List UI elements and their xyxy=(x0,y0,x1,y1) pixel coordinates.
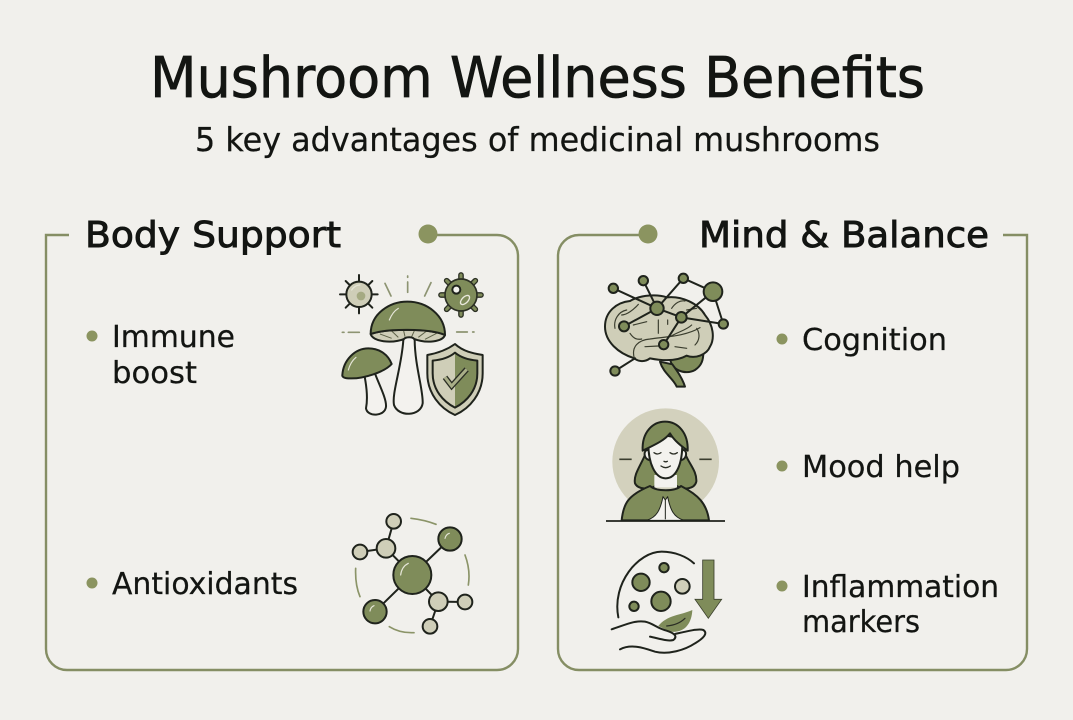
small mushroom xyxy=(342,348,392,415)
icon: antioxidant molecule xyxy=(353,514,472,634)
subtitle: 5 key advantages of medicinal mushrooms xyxy=(195,120,880,159)
label: immune boost: Immune xyxy=(112,320,235,355)
bonds xyxy=(360,521,465,626)
frame dot xyxy=(418,224,438,244)
side dashes xyxy=(619,457,712,462)
network lines xyxy=(613,278,723,371)
praying hands xyxy=(647,497,684,520)
label: mood help: Mood help xyxy=(802,450,960,485)
facial features xyxy=(654,453,677,468)
face xyxy=(648,436,682,478)
label: immune boost: boost xyxy=(112,356,197,391)
leaf xyxy=(658,610,692,632)
ears xyxy=(645,450,686,460)
radiating rays xyxy=(342,276,474,332)
frame dot xyxy=(638,224,658,244)
dashed ring xyxy=(356,518,469,633)
bullet: immune boost xyxy=(86,330,98,342)
body xyxy=(622,486,709,520)
panel: body support xyxy=(46,215,518,670)
network nodes xyxy=(609,274,728,376)
hair top xyxy=(643,422,688,451)
brain stem and cerebellum xyxy=(660,352,703,387)
panel frame xyxy=(558,235,1027,670)
icon: meditating person xyxy=(606,408,725,521)
bullet: antioxidants xyxy=(86,578,98,588)
ground line xyxy=(606,518,725,523)
big mushroom xyxy=(371,302,445,414)
brain folds xyxy=(615,301,700,358)
label: inflammation markers: markers xyxy=(802,605,920,640)
label: antioxidants: Antioxidants xyxy=(112,567,298,602)
title: Mushroom Wellness Benefits xyxy=(150,46,925,111)
shield with check xyxy=(427,344,483,415)
icon: inflammation markers decreasing xyxy=(612,552,722,653)
bullet: mood help xyxy=(776,460,788,472)
down arrow xyxy=(695,560,722,618)
panel: mind and balance xyxy=(558,215,1027,670)
bullet: cognition xyxy=(776,334,788,344)
neck xyxy=(654,475,677,487)
label: cognition: Cognition xyxy=(802,323,947,358)
halo xyxy=(612,408,719,515)
heading: body support: Body Support xyxy=(85,215,341,256)
atoms xyxy=(353,514,472,634)
back hair xyxy=(635,455,696,489)
particles xyxy=(629,563,690,611)
icon: brain network xyxy=(605,274,728,387)
label: inflammation markers: Inflammation xyxy=(802,570,999,605)
bullet: inflammation markers xyxy=(776,580,788,592)
brain outline xyxy=(605,295,713,361)
panel frame xyxy=(46,235,518,670)
heading: mind and balance: Mind & Balance xyxy=(699,215,989,256)
spiky virus xyxy=(441,275,481,315)
open hand xyxy=(612,621,705,653)
arc xyxy=(617,552,694,617)
icon: mushrooms with shield and microbes xyxy=(340,275,483,415)
sun-like microbe xyxy=(340,275,378,313)
